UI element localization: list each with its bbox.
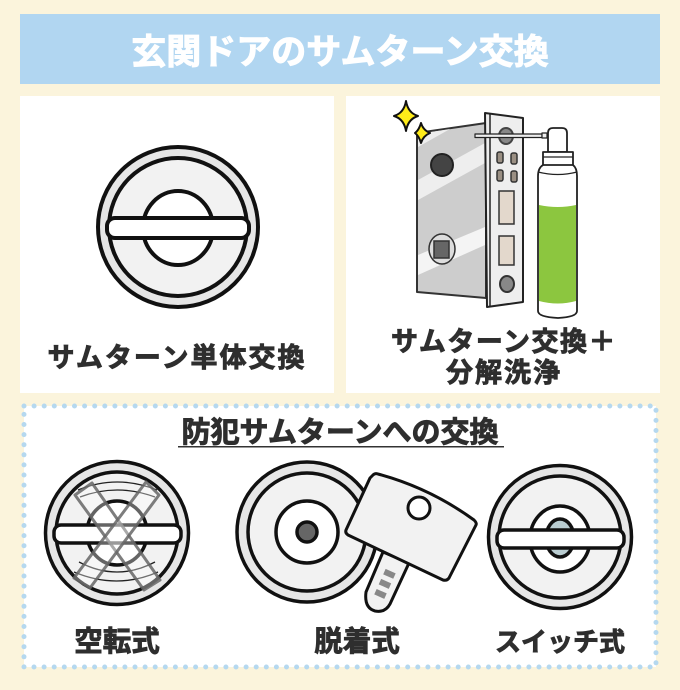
icon: thumb turn [98,147,258,307]
icon: removable type with key [237,462,476,611]
panel: thumb turn plus cleaning: 分解洗浄 [446,358,562,388]
heading: security thumb turns: 防犯サムターンへの交換 [182,416,498,449]
panel: thumb turn only [20,96,334,393]
icon: key [346,474,476,611]
icon: spray can [475,128,577,318]
label: switch: スイッチ式 [495,627,625,657]
label: thumb turn only: サムターン単体交換 [47,343,307,373]
title banner: 玄関ドアのサムターン交換 [131,33,549,72]
panel: thumb turn plus cleaning [346,96,660,393]
label: thumb turn plus cleaning: サムターン交換＋ [391,327,617,357]
icon: switch type [488,466,632,608]
icon: sparkles [394,101,430,143]
panel: security thumb turns [24,406,656,667]
icon: idle-spin type [46,462,188,604]
icon: lock case [417,113,523,307]
title banner [20,14,660,84]
label: removable: 脱着式 [314,626,400,658]
label: idle-spin: 空転式 [74,626,160,658]
